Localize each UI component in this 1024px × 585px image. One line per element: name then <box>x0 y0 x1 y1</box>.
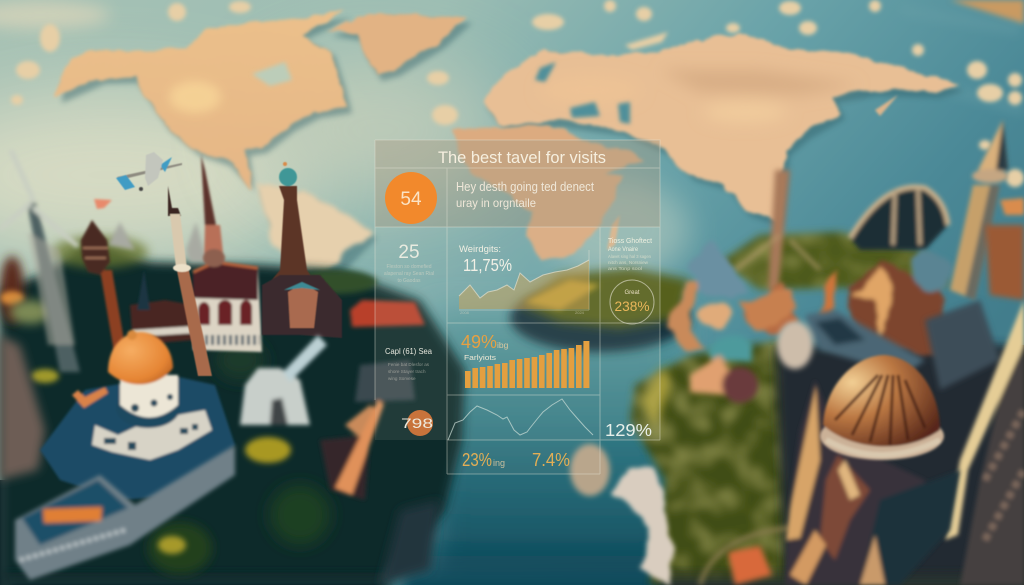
lattice tower <box>262 162 342 338</box>
stat: 798 <box>401 410 433 436</box>
panel glass tint <box>375 140 660 474</box>
big tower at right edge <box>945 300 1024 585</box>
caption: capital sea: wing Sorvese <box>388 376 416 381</box>
pointed spire <box>201 155 216 225</box>
area chart: 2008 <box>460 310 470 315</box>
side note text: Tioss Ghoftect <box>608 238 652 245</box>
intro text: uray in orgntaile <box>456 196 536 210</box>
side note text: Aone Vnaire <box>608 246 638 253</box>
stat: 49% <box>461 332 509 362</box>
arched dome <box>850 187 948 250</box>
long hall <box>130 270 195 345</box>
white coast <box>610 465 672 585</box>
area chart: 2024 <box>575 310 585 315</box>
bar chart <box>465 341 589 388</box>
infographic panel <box>375 140 660 474</box>
stat: 49%: Farlyiots <box>464 353 496 362</box>
stat: 54 orange circle: 54 <box>400 189 422 210</box>
stat: 25: to Gaodas <box>397 278 421 284</box>
caption: capital sea: Fenie bat Dlesfor as <box>388 362 430 367</box>
stat: 798: 798 <box>401 415 433 431</box>
inland seas <box>535 62 630 124</box>
Africa <box>450 125 643 263</box>
continent shadows <box>62 18 964 278</box>
stat: weights <box>459 244 512 275</box>
stat: 25: 25 <box>398 242 420 263</box>
intro text <box>456 180 594 210</box>
small teal dome <box>690 335 758 403</box>
green hill background <box>720 232 950 290</box>
caption: capital sea: Capl (61) Sea <box>385 347 433 356</box>
stat: 7.4%: 7.4% <box>532 450 570 470</box>
right island <box>570 120 1024 585</box>
orange ornate buildings <box>670 240 950 360</box>
white chapel <box>240 335 327 425</box>
minaret <box>168 186 212 376</box>
Eurasia <box>482 35 959 222</box>
Hudson Bay <box>252 62 292 86</box>
side note text: Alavet sing hal 3 sagen <box>608 254 651 259</box>
distant grey spires <box>108 222 207 262</box>
stat: 25 <box>384 242 434 284</box>
Eurasia relief shading <box>540 70 860 122</box>
side note text: nitch ans, Norsniew <box>608 260 649 265</box>
stat: weights: Weirdgits: <box>459 244 501 255</box>
area chart <box>459 260 589 315</box>
stat: 49%: ibg <box>497 340 509 350</box>
caption: capital sea <box>385 347 433 381</box>
side note text: ans Tonp sool <box>608 266 642 271</box>
stat: 25: alapenal ray Sean Rial <box>384 271 434 277</box>
title: The best tavel for visits <box>438 148 606 167</box>
Madagascar and Japan <box>607 95 898 250</box>
caption: capital sea: shore Stayer trach <box>388 369 426 374</box>
lower building with blue roof <box>15 445 235 580</box>
islands <box>11 0 1024 187</box>
icon: wind turbine <box>0 150 80 372</box>
stat: weights: 11,75% <box>463 255 512 275</box>
icon: flag <box>94 199 112 209</box>
stat: 54 orange circle <box>385 172 437 224</box>
ring stat 238%: Great <box>624 290 640 296</box>
red roof house <box>350 300 425 327</box>
intro text: Hey desth going ted denect <box>456 180 594 194</box>
ring stat 238% <box>610 280 654 324</box>
brown watch tower <box>81 220 126 352</box>
fluted dome <box>820 355 944 460</box>
orange roof <box>728 546 772 585</box>
big fluted dome building <box>785 380 960 585</box>
main mosque with orange dome <box>40 330 235 500</box>
North America highlight <box>169 81 221 113</box>
world map continents <box>11 0 1024 278</box>
blue grey roofs <box>777 300 1000 390</box>
stat: 25: Fleston so domefied <box>386 264 432 270</box>
palace with arches <box>193 155 262 352</box>
North America <box>57 12 347 188</box>
line chart <box>448 399 593 440</box>
stat: 129%: 129% <box>605 420 652 440</box>
middle small island <box>510 268 690 352</box>
ring stat 238%: 238% <box>614 298 650 314</box>
tall minaret <box>950 120 1008 300</box>
stat: 49%: 49% <box>461 332 497 352</box>
left landmarks <box>15 155 425 580</box>
South America <box>255 183 372 272</box>
small city roofs <box>320 360 415 500</box>
icon: airplane <box>116 152 182 191</box>
rear right building <box>1000 198 1024 215</box>
side note text <box>608 238 652 271</box>
stat: 23%: ing <box>493 458 505 468</box>
mast <box>768 170 790 290</box>
left island: dark ground <box>0 236 465 585</box>
stat: 23%: 23% <box>462 450 492 470</box>
Greenland <box>327 12 467 75</box>
